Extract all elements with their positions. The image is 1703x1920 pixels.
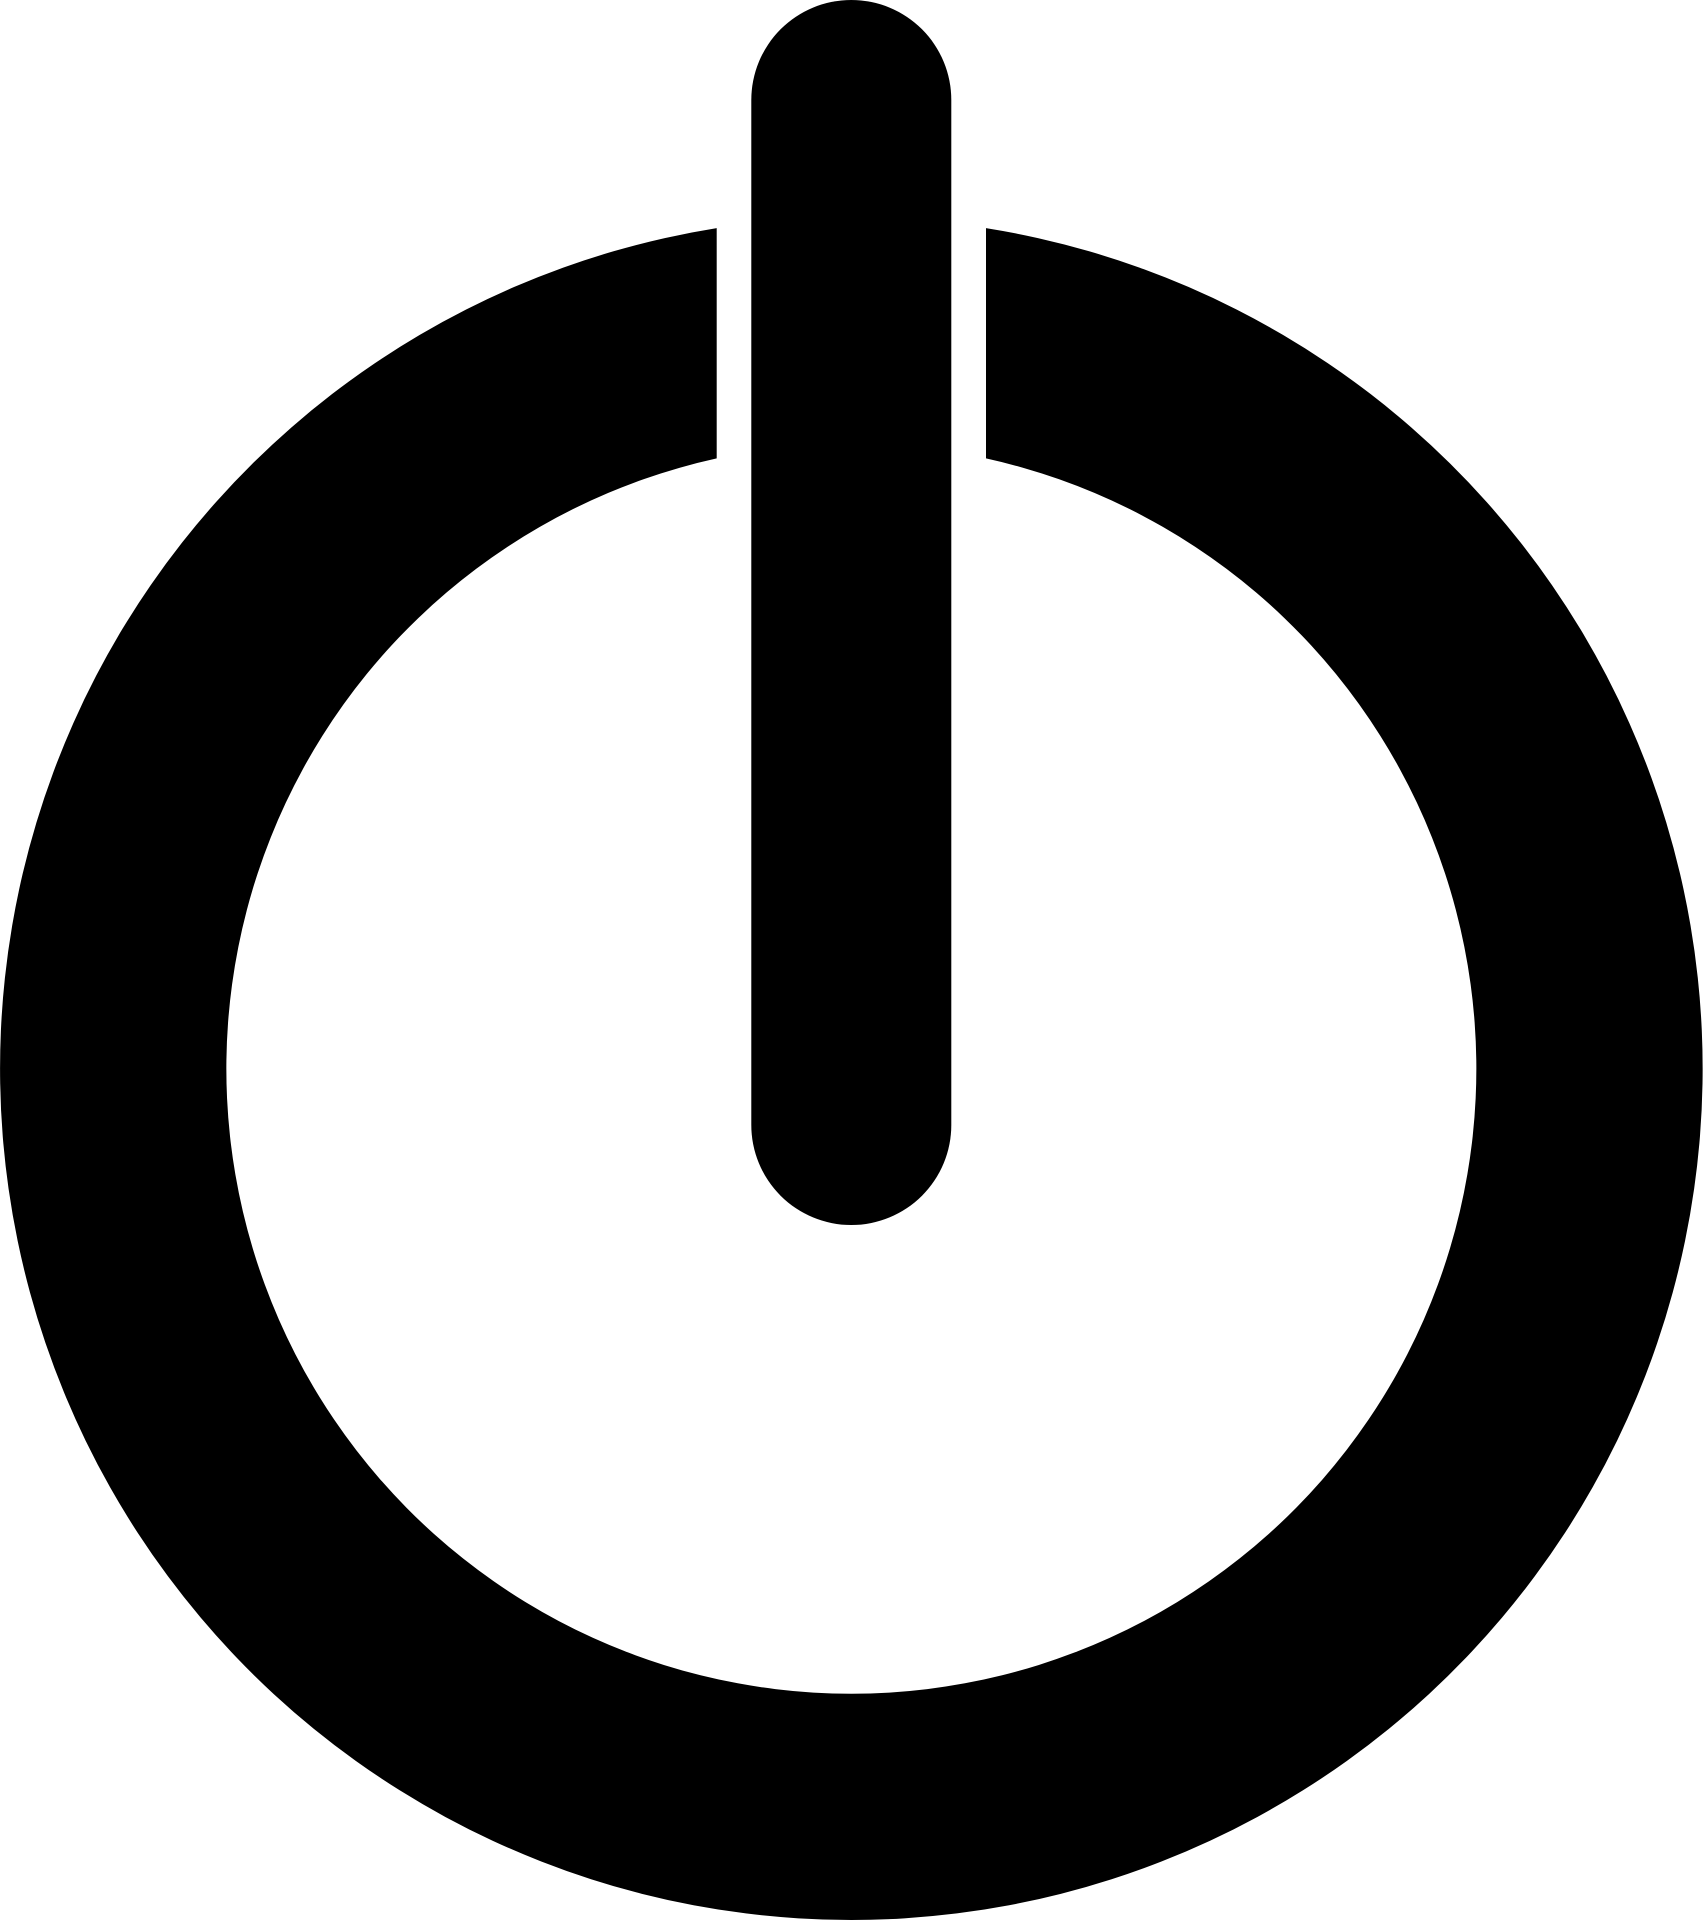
power bar: vertical rounded bar [751, 0, 951, 1225]
